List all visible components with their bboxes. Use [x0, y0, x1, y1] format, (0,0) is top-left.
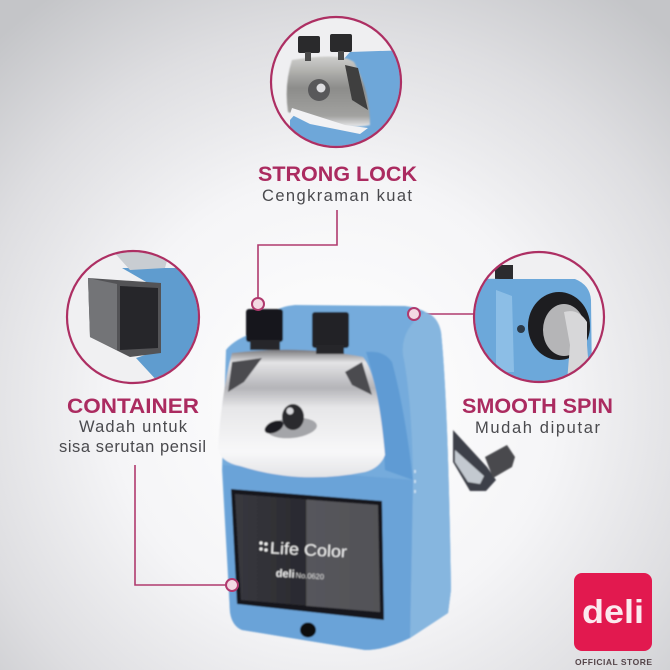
product: pencil sharpener: [218, 305, 515, 650]
body: [222, 305, 451, 650]
circle ring: [67, 251, 199, 383]
heading: smooth spin: SMOOTH SPIN: [462, 395, 613, 418]
heading: container: CONTAINER: [67, 395, 199, 418]
container window: [231, 489, 384, 620]
side marks: [414, 470, 416, 493]
chrome reflections: [228, 358, 372, 395]
connector: container: [135, 465, 226, 585]
window brand text: No.0620: [295, 571, 324, 581]
callout: container: [66, 250, 200, 384]
chrome screw: [263, 404, 318, 441]
left knob: [246, 309, 283, 350]
marker dot: strong lock: [252, 298, 264, 310]
connector: strong lock: [258, 210, 337, 298]
official store label: OFFICIAL STORE: [575, 657, 652, 667]
callout: strong lock: [270, 16, 410, 150]
subtext: container line 2: sisa serutan pensil: [59, 438, 206, 456]
body front panel: [223, 465, 413, 650]
circle photo: container: [88, 252, 198, 378]
chrome lock plate: [218, 350, 385, 477]
subtext: strong lock: Cengkraman kuat: [262, 187, 412, 205]
logo wordmark: deli: [582, 593, 644, 630]
window brand text: [268, 539, 348, 583]
grey window highlight: [306, 500, 380, 612]
subtext: container line 1: Wadah untuk: [79, 418, 188, 436]
subtext: smooth spin: Mudah diputar: [475, 419, 600, 437]
right knob: [312, 312, 349, 354]
marker dot: container: [226, 579, 238, 591]
brand logo: deli official store: [574, 573, 652, 667]
container window glass: [235, 494, 380, 612]
heading: strong lock: STRONG LOCK: [258, 163, 417, 186]
window brand text: Life Color: [270, 539, 348, 561]
logo square: [574, 573, 652, 651]
window brand text: deli: [275, 568, 295, 581]
body band around chrome: [366, 352, 413, 480]
connector: smooth spin: [420, 313, 474, 315]
marker dot: smooth spin: [408, 308, 420, 320]
circle ring: [474, 252, 604, 382]
callout: smooth spin: [474, 252, 604, 382]
window logo dots: [259, 541, 268, 552]
circle ring: [271, 17, 401, 147]
crank handle: [453, 430, 515, 491]
circle photo: strong lock: [272, 18, 400, 146]
circle photo: smooth spin: [475, 265, 592, 381]
pencil hole: [300, 622, 316, 638]
body right side: [403, 312, 451, 638]
